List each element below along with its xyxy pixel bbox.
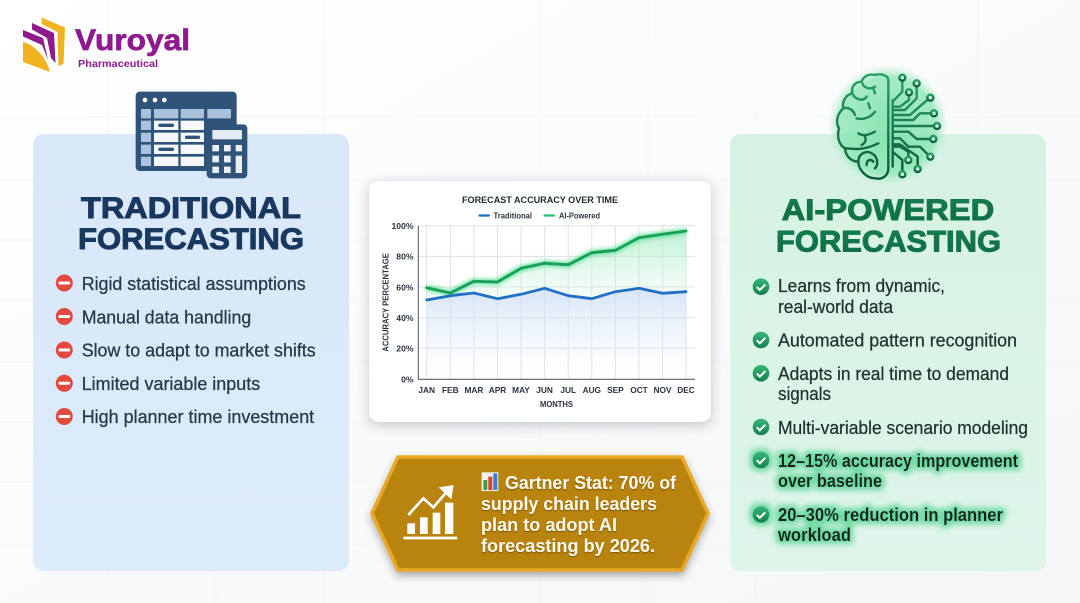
x axis labels: DEC [677, 385, 695, 395]
highlight: accuracy improvement: over baseline [778, 471, 882, 491]
item: rigid assumptions: Rigid statistical assumptions [82, 274, 306, 294]
item: dynamic data: real-world data [778, 297, 894, 317]
heading: AI-POWERED [782, 194, 994, 227]
y axis labels: 100% [392, 221, 414, 231]
heading: TRADITIONAL [81, 192, 301, 225]
brain halo [828, 65, 948, 185]
legend [480, 210, 600, 220]
hexagon badge [372, 457, 708, 570]
y axis title: ACCURACY PERCENTAGE [381, 253, 391, 352]
item: scenario modeling: Multi-variable scenario modeling [778, 418, 1028, 438]
logo name: Vuroyal [75, 24, 190, 57]
x axis labels: JAN [418, 385, 435, 395]
logo: Vuroyal Pharmaceutical [23, 18, 190, 72]
highlight: accuracy improvement: 12–15% accuracy improvement [778, 451, 1018, 471]
x axis labels: MAY [512, 385, 530, 395]
series: ai-powered glow [427, 231, 686, 293]
item: limited inputs: Limited variable inputs [82, 374, 260, 394]
item: real-time [753, 364, 1009, 404]
y axis labels: 60% [396, 282, 414, 292]
x axis labels [418, 385, 695, 395]
x axis labels: JUN [536, 385, 553, 395]
line chart [381, 221, 695, 409]
x axis title: MONTHS [540, 399, 573, 409]
item: real-time: signals [778, 384, 831, 404]
stat text: supply chain leaders [481, 493, 657, 514]
legend: AI-Powered [559, 210, 600, 220]
card [369, 181, 711, 422]
y axis labels: 0% [401, 374, 414, 384]
heading: FORECASTING [776, 226, 1001, 259]
heading: FORECASTING [78, 223, 304, 256]
panel background [33, 134, 349, 571]
icon: logo mark [23, 18, 65, 72]
x axis labels: MAR [464, 385, 483, 395]
area: ai-powered [427, 231, 686, 300]
y axis labels: 80% [396, 252, 414, 262]
x axis labels: FEB [442, 385, 459, 395]
highlight: accuracy improvement [753, 451, 1018, 491]
series: ai-powered [427, 231, 686, 293]
y axis labels [392, 221, 414, 384]
item: manual data: Manual data handling [82, 307, 251, 327]
icon: brain with circuits [828, 65, 948, 185]
icon: bar chart emoji [482, 472, 498, 491]
y axis labels: 20% [396, 344, 414, 354]
list: benefits [753, 276, 1028, 545]
highlight: workload reduction: 20–30% reduction in planner [778, 505, 1003, 525]
x axis labels: JUL [560, 385, 576, 395]
y axis labels: 40% [396, 313, 414, 323]
stat text: forecasting by 2026. [481, 535, 655, 556]
item: real-time: Adapts in real time to demand [778, 364, 1009, 384]
logo tagline: Pharmaceutical [78, 58, 158, 70]
chart title: FORECAST ACCURACY OVER TIME [462, 194, 618, 205]
axes [418, 226, 695, 379]
series: traditional [427, 288, 686, 300]
panel: forecast accuracy chart [369, 181, 711, 422]
panel: ai-powered forecasting [730, 65, 1046, 571]
callout: gartner stat [372, 457, 708, 570]
x axis labels: SEP [607, 385, 624, 395]
item: dynamic data: Learns from dynamic, [778, 276, 945, 296]
stat text [481, 472, 677, 556]
stat text: plan to adopt AI [481, 514, 617, 535]
highlight: workload reduction [753, 505, 1003, 545]
list: limitations [56, 274, 316, 427]
item: slow to adapt: Slow to adapt to market shifts [82, 341, 316, 361]
highlight: workload reduction: workload [777, 525, 851, 545]
panel: traditional forecasting [33, 92, 349, 571]
item: planner time: High planner time investment [82, 407, 314, 427]
item: dynamic data [753, 276, 945, 317]
stat text: Gartner Stat: 70% of [505, 472, 677, 493]
legend: Traditional [494, 210, 532, 220]
area: traditional [427, 288, 686, 379]
icon: growth chart [403, 485, 457, 539]
icon: spreadsheet and calculator [136, 92, 247, 178]
panel background [730, 134, 1046, 571]
x axis labels: APR [489, 385, 506, 395]
x axis labels: AUG [583, 385, 601, 395]
grid lines [418, 226, 695, 379]
heading [78, 192, 304, 256]
item: pattern recognition: Automated pattern recognition [778, 331, 1017, 351]
x axis labels: NOV [654, 385, 672, 395]
x axis labels: OCT [630, 385, 648, 395]
heading [776, 194, 1001, 259]
